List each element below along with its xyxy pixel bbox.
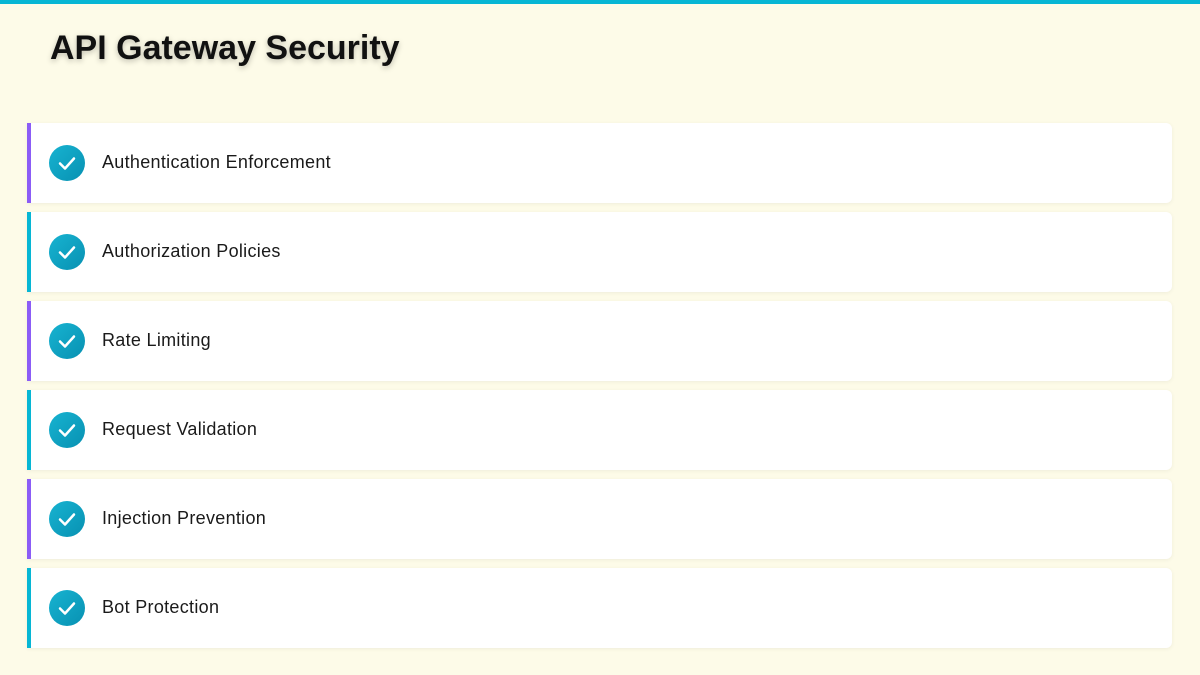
card: Request Validation: [27, 390, 1172, 470]
card: Rate Limiting: [27, 301, 1172, 381]
icon: check: [49, 501, 85, 537]
label: Request Validation: [102, 419, 257, 439]
icon: check: [49, 323, 85, 359]
title: API Gateway Security: [50, 29, 400, 67]
label: Rate Limiting: [102, 330, 211, 350]
icon: check: [49, 590, 85, 626]
card: Authorization Policies: [27, 212, 1172, 292]
icon: check: [49, 145, 85, 181]
label: Injection Prevention: [102, 508, 266, 528]
icon: check: [49, 234, 85, 270]
label: Bot Protection: [102, 597, 219, 617]
card: Injection Prevention: [27, 479, 1172, 559]
card: Bot Protection: [27, 568, 1172, 648]
label: Authorization Policies: [102, 241, 281, 261]
label: Authentication Enforcement: [102, 152, 331, 172]
card: Authentication Enforcement: [27, 123, 1172, 203]
icon: check: [49, 412, 85, 448]
